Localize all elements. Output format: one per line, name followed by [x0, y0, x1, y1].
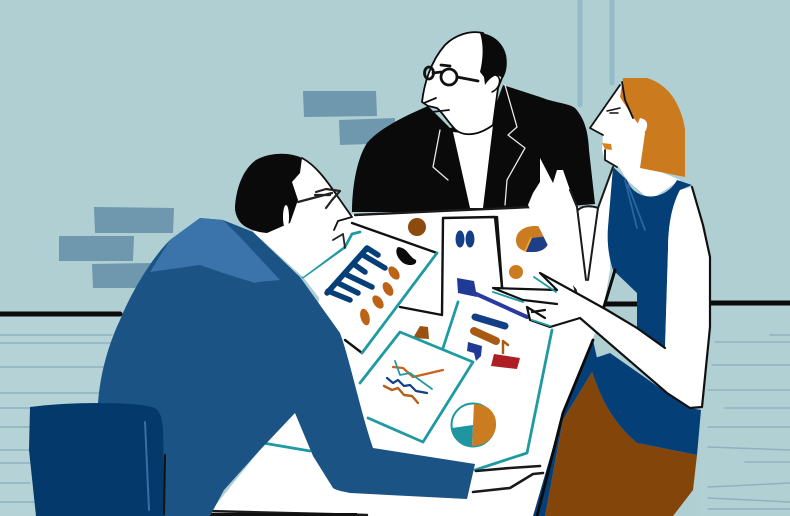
glasses [298, 189, 340, 208]
sheet: line chart [360, 332, 473, 442]
black jacket [352, 85, 595, 212]
hair [235, 154, 302, 233]
man in black jacket, centre [352, 32, 595, 212]
right arm and pointing hand [493, 187, 710, 408]
woman [493, 78, 710, 516]
navy marks [456, 230, 464, 248]
head [422, 32, 505, 134]
man's hand at table edge [473, 466, 543, 492]
ear [283, 205, 289, 229]
mouth and nose [424, 98, 449, 112]
pie [516, 226, 549, 252]
table [207, 207, 600, 516]
shirt [453, 125, 493, 208]
blue jacket [98, 218, 475, 516]
lower dress [592, 353, 701, 455]
black blob [396, 247, 416, 265]
brown bar [474, 331, 496, 341]
lighter shoulder patch [150, 218, 280, 283]
neck and chest [612, 155, 680, 200]
black edge line [537, 340, 593, 516]
brown dot [408, 218, 426, 236]
red block [491, 354, 520, 369]
brown stem [503, 341, 508, 353]
sheet: pie chart top right [497, 217, 549, 287]
dress side line [603, 270, 615, 310]
hair [480, 33, 507, 85]
skirt [545, 372, 697, 516]
pie chart [452, 404, 496, 446]
table edges [207, 207, 576, 515]
sheet: centre with navy marks [400, 217, 527, 317]
dress fold [625, 180, 645, 230]
eye [607, 108, 620, 113]
teal table line [263, 443, 310, 451]
sheet: large lower page [413, 302, 552, 470]
glasses [424, 65, 478, 85]
dress top [608, 167, 692, 348]
mouth [333, 234, 345, 248]
lips [602, 143, 612, 150]
navy block [467, 342, 482, 361]
navy front strip [533, 340, 597, 516]
brown mound [413, 326, 429, 339]
lapel lines [433, 85, 525, 205]
ear [492, 75, 500, 92]
sheet: bar chart [303, 223, 437, 353]
face [590, 82, 648, 168]
lines [393, 367, 443, 377]
bars [327, 248, 385, 300]
table bottom shadow [207, 513, 357, 516]
man in blue jacket, foreground [98, 154, 475, 516]
navy bar [475, 317, 505, 326]
dot [509, 265, 523, 279]
raised hand and arm [528, 158, 613, 310]
ear [636, 118, 647, 134]
hair [620, 78, 685, 177]
chair [29, 403, 165, 516]
orange pills [358, 264, 402, 326]
wall bricks [59, 91, 395, 288]
head face [253, 158, 352, 277]
